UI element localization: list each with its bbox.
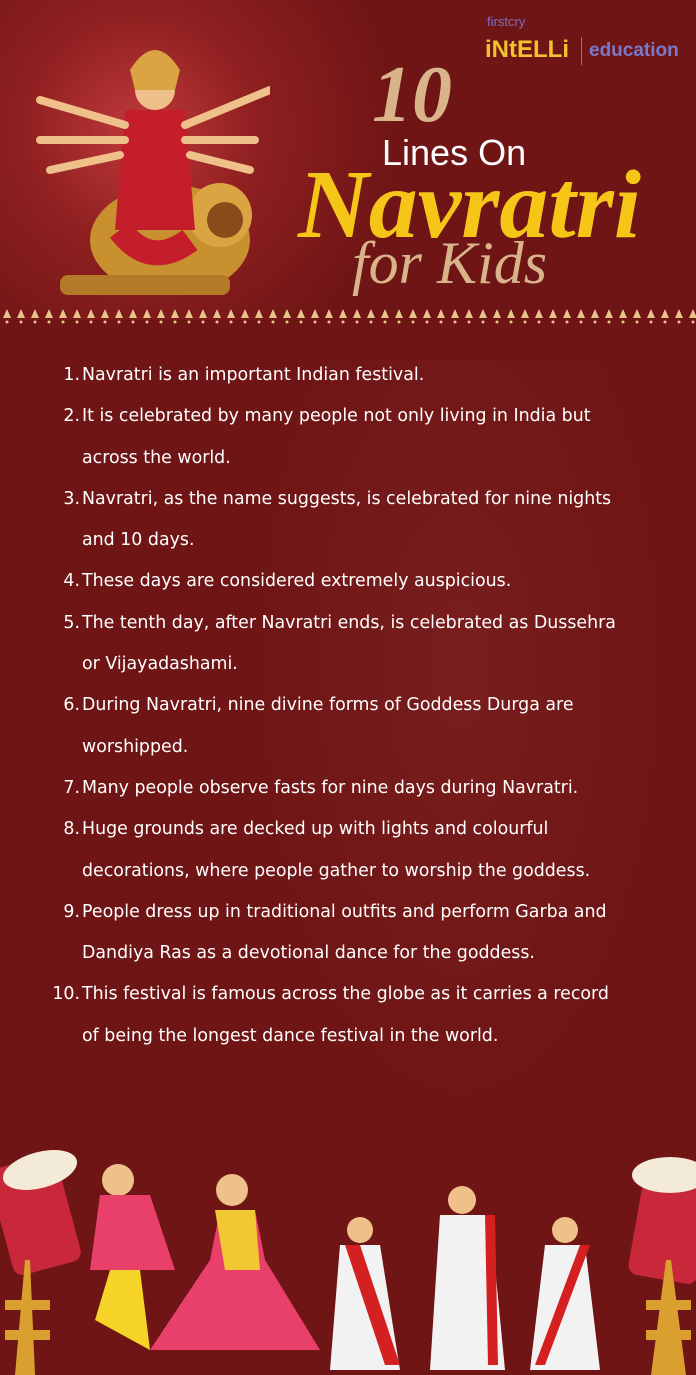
garba dancers [90,1164,175,1350]
list of 10 lines: decorations, where people gather to worship the goddess. [82,861,590,881]
title: Navratri [298,151,641,259]
title [297,51,641,296]
illustration: goddess Durga on lion [36,50,270,295]
logo: firstcry [487,14,525,29]
list of 10 lines: The tenth day, after Navratri ends, is celebrated as Dussehra [82,613,616,633]
list of 10 lines: Huge grounds are decked up with lights and colourful [82,819,548,839]
list of 10 lines [52,365,616,1046]
list of 10 lines: Many people observe fasts for nine days during Navratri. [82,778,578,798]
logo: iNtELLi [485,36,569,63]
list of 10 lines: This festival is famous across the globe as it carries a record [82,984,609,1004]
list of 10 lines: During Navratri, nine divine forms of Goddess Durga are [82,695,574,715]
list of 10 lines: worshipped. [82,737,188,757]
list of 10 lines: 6. [63,695,80,715]
list of 10 lines: Navratri is an important Indian festival. [82,365,424,385]
list of 10 lines: 8. [63,819,80,839]
list of 10 lines: across the world. [82,448,231,468]
list of 10 lines: 3. [63,489,80,509]
list of 10 lines: Navratri, as the name suggests, is celebrated for nine nights [82,489,611,509]
faint background silhouette [250,360,670,1120]
lamps [5,1260,50,1375]
drums [0,1143,83,1277]
title: 10 [372,51,452,139]
list of 10 lines: 5. [63,613,80,633]
list of 10 lines: 4. [63,571,80,591]
list of 10 lines: People dress up in traditional outfits and perform Garba and [82,902,607,922]
list of 10 lines: 1. [63,365,80,385]
logo: education [589,40,679,61]
list of 10 lines: or Vijayadashami. [82,654,238,674]
decorative border [3,309,696,324]
list of 10 lines: 10. [52,984,80,1004]
list of 10 lines: 2. [63,406,80,426]
list of 10 lines: It is celebrated by many people not only living in India but [82,406,591,426]
illustration: dancers, drums and lamps [0,1150,696,1375]
list of 10 lines: of being the longest dance festival in the world. [82,1026,498,1046]
women in white sarees [330,1217,400,1370]
list of 10 lines: 9. [63,902,80,922]
list of 10 lines: 7. [63,778,80,798]
title: for Kids [352,230,547,296]
list of 10 lines: Dandiya Ras as a devotional dance for the goddess. [82,943,535,963]
header background glow [0,0,696,320]
list of 10 lines: These days are considered extremely auspicious. [82,571,511,591]
title: Lines On [382,132,526,173]
list of 10 lines: and 10 days. [82,530,194,550]
logo [485,14,679,65]
